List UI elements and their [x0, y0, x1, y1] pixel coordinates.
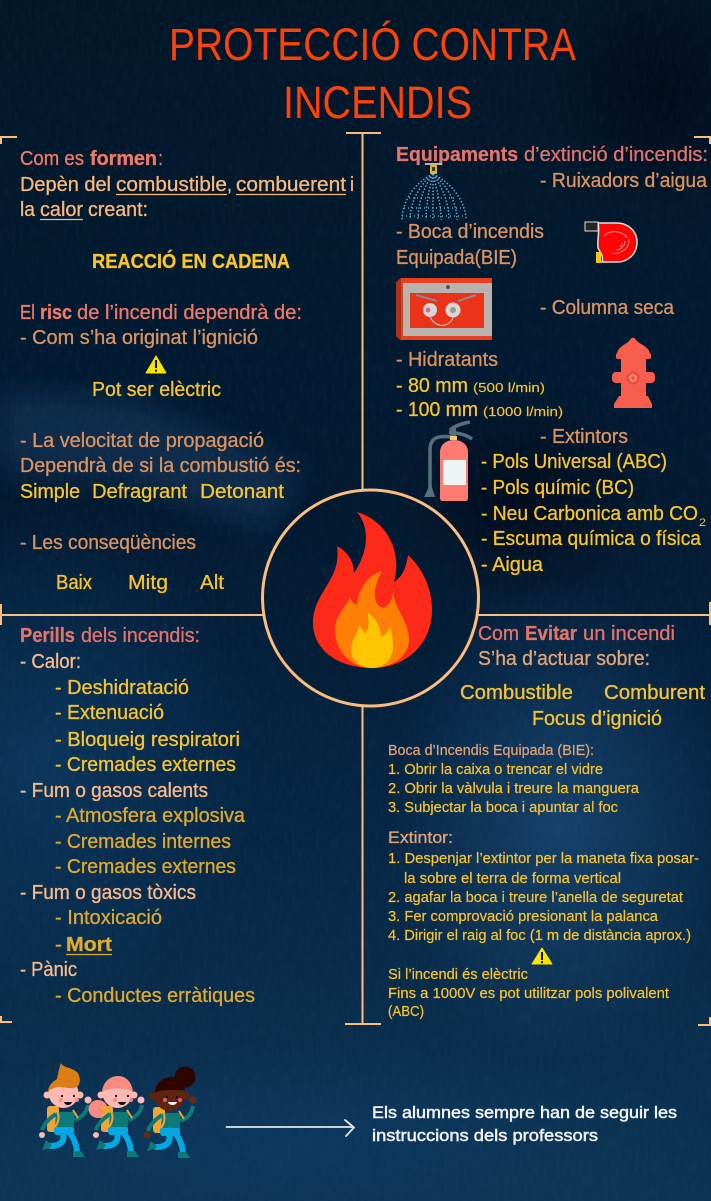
list: tipus d'extintors: - Neu Carbonica amb CO [481, 503, 698, 525]
heading: perills: dels incendis: [81, 625, 200, 647]
heading: com evitar: un incendi [583, 623, 675, 645]
text: boca d'incendis: Equipada(BIE) [396, 247, 517, 269]
text: nivells [56, 572, 224, 594]
text: instruccions extintor: la sobre el terra de forma vertical [404, 871, 621, 887]
text: instruccions extintor [388, 828, 699, 944]
list: fum o gasos calents: - Atmosfera explosiva [55, 805, 246, 827]
heading: perills: Perills [20, 625, 75, 647]
heading: com es formen [20, 148, 163, 170]
panel: com evitar [388, 623, 705, 1020]
text: tipus de combustio: Simple [20, 481, 80, 503]
list: fum o gasos calents: - Cremades externes [55, 856, 236, 878]
text: risc: de l’incendi dependrà de: [77, 302, 302, 324]
text: factors: Focus d’ignició [532, 708, 662, 730]
list: fum o gasos toxics: Mort [66, 934, 112, 956]
text: ruixadors: - Ruixadors d’aigua [540, 170, 708, 192]
list: fum o gasos calents [20, 780, 246, 878]
icon: BIE cabinet [396, 278, 492, 341]
text: tipus de combustio: Defragrant [92, 481, 187, 503]
text: instruccions extintor: 3. Fer comprovació presionant la palanca [388, 909, 659, 925]
text: risc: risc [40, 302, 72, 324]
text: instruccions extintor: Extintor: [388, 828, 453, 847]
title: INCENDIS [283, 77, 472, 128]
text: boca d'incendis [396, 221, 544, 269]
text: fire triangle: Depèn del [20, 174, 111, 196]
arrow [226, 1120, 354, 1136]
text: fire triangle: , [227, 174, 232, 196]
heading: com evitar: S’ha d’actuar sobre: [478, 648, 650, 670]
text: instruccions extintor: 4. Dirigir el raig al foc (1 m de distància aprox.) [388, 928, 691, 944]
heading: equipaments: d’extinció d’incendis: [524, 144, 708, 166]
text: incendi electric [388, 967, 669, 1020]
list: calor [20, 651, 240, 776]
text: instruccions BIE: 1. Obrir la caixa o trencar el vidre [388, 762, 603, 778]
text: hidratants: (500 l/min) [473, 380, 545, 395]
text: consequencies: - Les conseqüències [20, 532, 196, 554]
text: hidratants: - 80 mm [396, 375, 468, 397]
text: instruccions BIE: Boca d’Incendis Equipada (BIE): [388, 743, 594, 759]
text: alumnes: Els alumnes sempre han de seguir les [372, 1103, 677, 1122]
text: alumnes [372, 1103, 677, 1145]
list: tipus d'extintors: - Pols Universal (ABC) [481, 451, 667, 473]
text: hidratants [396, 349, 563, 421]
text: fire triangle: calor [40, 199, 83, 221]
text: instruccions BIE [388, 743, 640, 816]
text: velocitat: - La velocitat de propagació [20, 430, 264, 452]
heading: com evitar [478, 623, 675, 670]
text: incendi electric: Fins a 1000V es pot utilitzar pols polivalent [388, 986, 669, 1002]
icon: flame in circle [262, 490, 478, 706]
text: fire triangle: creant: [88, 199, 148, 221]
student 2 [88, 1076, 144, 1157]
panel: perills [20, 625, 255, 1007]
list: panic [20, 959, 255, 1007]
text: pot ser electric: Pot ser elèctric [92, 379, 221, 401]
list: fum o gasos calents: - Cremades internes [55, 831, 231, 853]
text: instruccions BIE: 3. Subjectar la boca i apuntar al foc [388, 800, 618, 816]
icon: extinguisher [424, 422, 472, 501]
text: hidratants: (1000 l/min) [483, 404, 563, 419]
list: fum o gasos toxics [20, 882, 196, 956]
list: fum o gasos toxics: - Fum o gasos tòxics [20, 882, 196, 904]
list: calor: - Extenuació [55, 702, 164, 724]
text: columna seca: - Columna seca [540, 297, 675, 319]
icon: three students running [39, 1063, 196, 1158]
title: PROTECCIÓ CONTRA [169, 19, 576, 70]
icon: warning [146, 356, 166, 373]
icon: hydrant [612, 338, 655, 408]
text: extintors: - Extintors [540, 426, 628, 448]
list: tipus d'extintors: - Escuma química o física [481, 528, 702, 550]
text: incendi electric: Si l’incendi és elèctric [388, 967, 528, 983]
list: calor: - Cremades externes [55, 754, 236, 776]
text: factors: Comburent [604, 682, 705, 704]
icon: sprinkler [402, 163, 466, 220]
text: fire triangle: combuerent [236, 174, 346, 196]
heading: com es formen: Com es [20, 148, 84, 170]
heading: com evitar: Com [478, 623, 519, 645]
list: calor: - Bloqueig respiratori [55, 729, 240, 751]
panel: com es formen [20, 148, 354, 594]
list: fum o gasos toxics: - Intoxicació [55, 907, 162, 929]
list: calor: - Deshidratació [55, 677, 189, 699]
heading: equipaments: Equipaments [396, 144, 518, 166]
text: factors: Combustible [460, 682, 573, 704]
text: nivells: Alt [200, 572, 224, 594]
text: fire triangle: i [350, 174, 354, 196]
heading: com evitar: Evitar [525, 623, 577, 645]
text: boca d'incendis: - Boca d’incendis [396, 221, 544, 243]
list: calor: - Calor: [20, 651, 81, 673]
student 1 [39, 1063, 92, 1157]
text: instruccions extintor: 2. agafar la boca i treure l’anella de seguretat [388, 890, 683, 906]
icon: hose reel [585, 222, 637, 263]
list: tipus d'extintors: - Pols químic (BC) [481, 477, 634, 499]
text: ignicio: - Com s’ha originat l’ignició [20, 327, 258, 349]
heading: equipaments [396, 144, 708, 166]
text: tipus de combustio: Detonant [200, 481, 284, 503]
list: tipus d'extintors [481, 451, 706, 576]
text: velocitat: Dependrà de si la combustió és: [20, 455, 301, 477]
heading: com es formen: formen [90, 148, 157, 170]
text: risc: El [20, 302, 35, 324]
text: fire triangle: combustible [116, 174, 227, 196]
text: nivells: Baix [56, 572, 92, 594]
text: hidratants: - 100 mm [396, 399, 478, 421]
text: incendi electric: (ABC) [388, 1004, 424, 1020]
text: instruccions extintor: 1. Despenjar l’extintor per la maneta fixa posar- [388, 851, 699, 867]
list: fum o gasos calents: - Fum o gasos calents [20, 780, 208, 802]
title [169, 19, 576, 128]
text: fire triangle [20, 174, 354, 221]
list: fum o gasos toxics: - [55, 934, 62, 956]
icon: warning [532, 948, 552, 964]
text: instruccions BIE: 2. Obrir la vàlvula i treure la manguera [388, 781, 640, 797]
text: factors [460, 682, 705, 730]
text: alumnes: instruccions dels professors [372, 1126, 598, 1145]
list: tipus d'extintors: - Aigua [481, 554, 544, 576]
callout: reaccio en cadena: REACCIÓ EN CADENA [92, 249, 290, 273]
text: hidratants: - Hidratants [396, 349, 498, 371]
heading: perills [20, 625, 200, 647]
list: panic: - Pànic [20, 959, 77, 981]
list: panic: - Conductes erràtiques [55, 985, 255, 1007]
text: nivells: Mitg [128, 572, 168, 594]
frame lines [0, 133, 711, 1025]
text: velocitat [20, 430, 301, 477]
text: fire triangle: la [20, 199, 36, 221]
student 3 [144, 1066, 196, 1158]
panel: equipaments [396, 144, 708, 576]
text: tipus de combustio [20, 481, 284, 503]
list: tipus d'extintors: 2 [699, 517, 706, 529]
heading: com es formen: : [158, 148, 163, 170]
